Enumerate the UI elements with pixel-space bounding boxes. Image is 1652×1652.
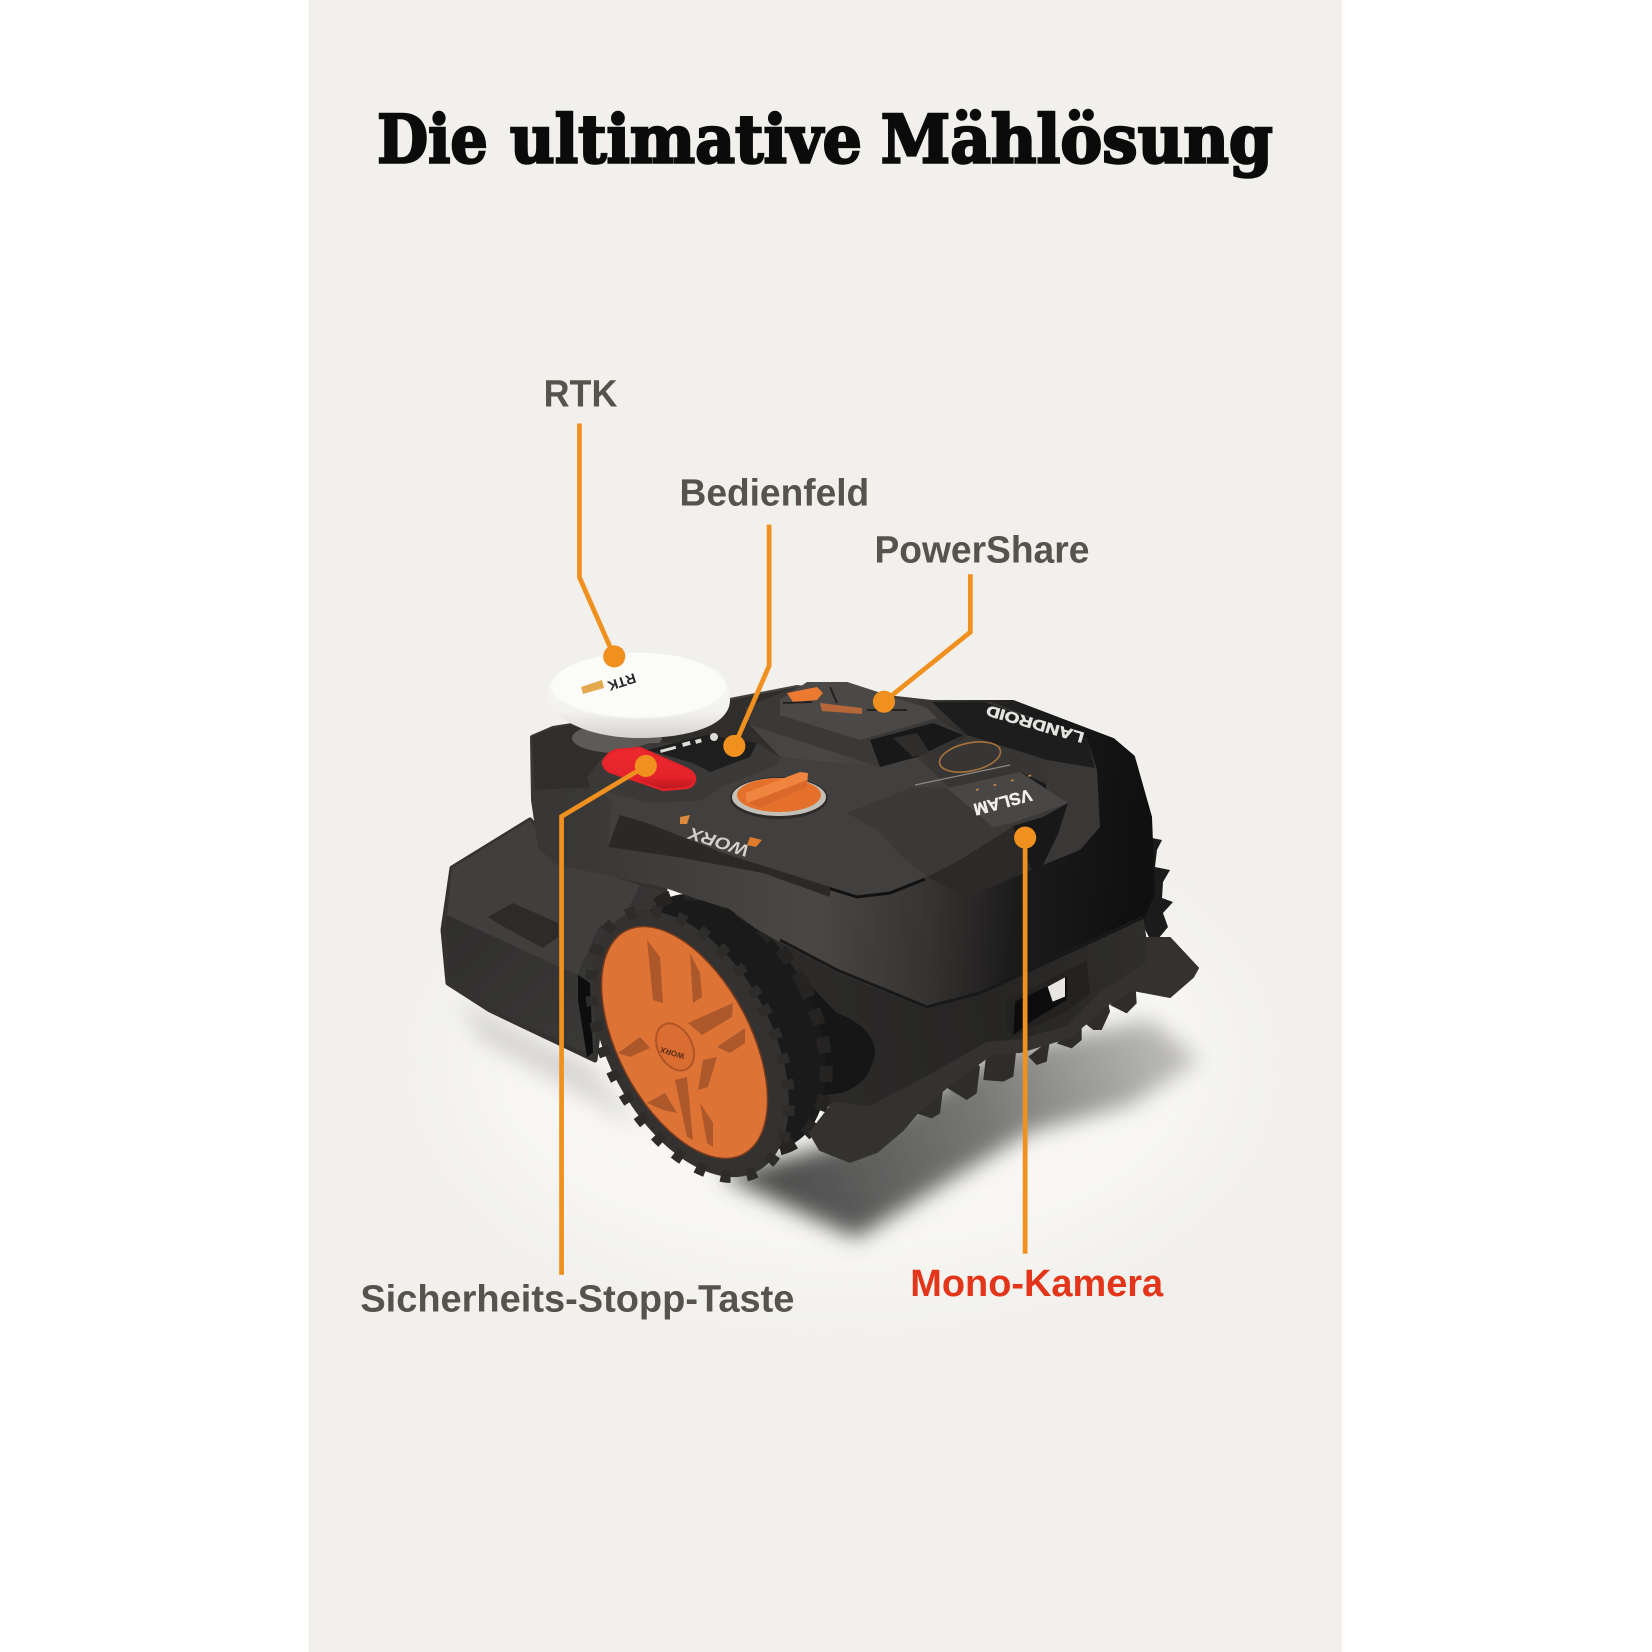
brand text: Landroid: LANDROID: [984, 701, 1086, 745]
orange dial: [730, 772, 828, 819]
callout line: RTK: [579, 424, 625, 667]
title: Die: [377, 100, 488, 178]
dial disc: [737, 778, 821, 812]
housing recess: [488, 903, 558, 948]
title: ultimative: [510, 100, 862, 178]
logo marks: [680, 815, 690, 824]
label: Sicherheits-Stopp-Taste: Sicherheits-Stopp-Taste: [360, 1279, 794, 1321]
handle and bumper teeth: [917, 960, 1137, 1118]
side highlight slash: [915, 765, 1010, 785]
puck top face: [552, 654, 726, 718]
label: Mono-Kamera: Mono-Kamera: [910, 1263, 1164, 1305]
label: PowerShare: PowerShare: [874, 530, 1089, 572]
cover marks: [783, 687, 907, 710]
puck logo mark: [581, 680, 604, 694]
lid seam: [770, 870, 925, 897]
background glow around product: [453, 843, 1233, 1285]
bumper teeth: [917, 977, 1137, 1118]
label strip: [932, 701, 1095, 768]
title: [377, 100, 1273, 178]
RTK antenna puck: [548, 653, 730, 738]
Worx logo: [680, 815, 762, 860]
ground shadow: [460, 1000, 1200, 1238]
front bumper: [810, 938, 1198, 1162]
red stop button: [603, 748, 695, 790]
Worx logo: WORX: [685, 823, 751, 860]
deck: [532, 687, 797, 803]
wheel cover: [790, 965, 875, 1100]
vision badge: [937, 737, 1003, 777]
label: Bedienfeld: Bedienfeld: [680, 473, 869, 515]
rear tread teeth: [1130, 830, 1173, 945]
dial ring: [732, 778, 826, 816]
display icons: [660, 733, 718, 753]
title: Mählösung: [881, 100, 1273, 178]
handle opening: [1013, 977, 1067, 1035]
orange slider: [787, 687, 823, 702]
callout line: Mono-Kamera: [1014, 827, 1036, 1254]
callout line: Sicherheits-Stopp-Taste: [562, 755, 657, 1275]
hub face: [568, 901, 801, 1184]
dial handle shade: [747, 780, 807, 808]
handle light gap: [1048, 977, 1065, 1002]
wheel hub: [566, 899, 803, 1186]
side connector: [578, 975, 593, 1057]
housing top face: [447, 820, 640, 975]
cover logo: [820, 703, 862, 714]
product illustration: robotic mower: [443, 653, 1200, 1238]
rear left housing: [443, 820, 665, 1060]
camera housing: [847, 735, 1068, 897]
hub centre cap: [648, 1017, 702, 1077]
vSLAM logo: VSLAM: [972, 785, 1034, 819]
wheel back tread: [589, 861, 867, 1183]
cover top: [780, 682, 937, 740]
latch: [870, 723, 963, 767]
housing top face: [947, 772, 1068, 827]
puck logo: RTK: [606, 670, 638, 694]
latch tab: [893, 733, 930, 757]
dial handle: [745, 772, 808, 808]
main shell: [532, 687, 1153, 1007]
shell lip: [780, 917, 1143, 1007]
RTK antenna base: [572, 723, 662, 753]
camera lens strip: [1013, 803, 1068, 870]
lower chassis: [720, 895, 1150, 1115]
hub spokes: [618, 940, 745, 1147]
lid slot: [608, 815, 830, 897]
camera rear plate: [930, 735, 1048, 788]
callout line: Bedienfeld: [723, 525, 769, 757]
vSLAM accent: [976, 772, 1044, 790]
callout line: PowerShare: [873, 574, 970, 713]
hub logo: WORX: [659, 1045, 686, 1061]
housing lower face: [927, 826, 1043, 897]
wheel tread teeth: [550, 878, 830, 1210]
PowerShare battery cover: [745, 682, 963, 767]
gray side band: [932, 702, 1100, 865]
control panel housing: [587, 743, 780, 803]
housing body: [847, 772, 1068, 897]
control panel display: [647, 733, 757, 772]
carry handle: [1007, 960, 1090, 1037]
label: RTK: RTK: [544, 374, 618, 416]
lid surface: [590, 757, 950, 897]
panel: background: [309, 0, 1342, 1652]
